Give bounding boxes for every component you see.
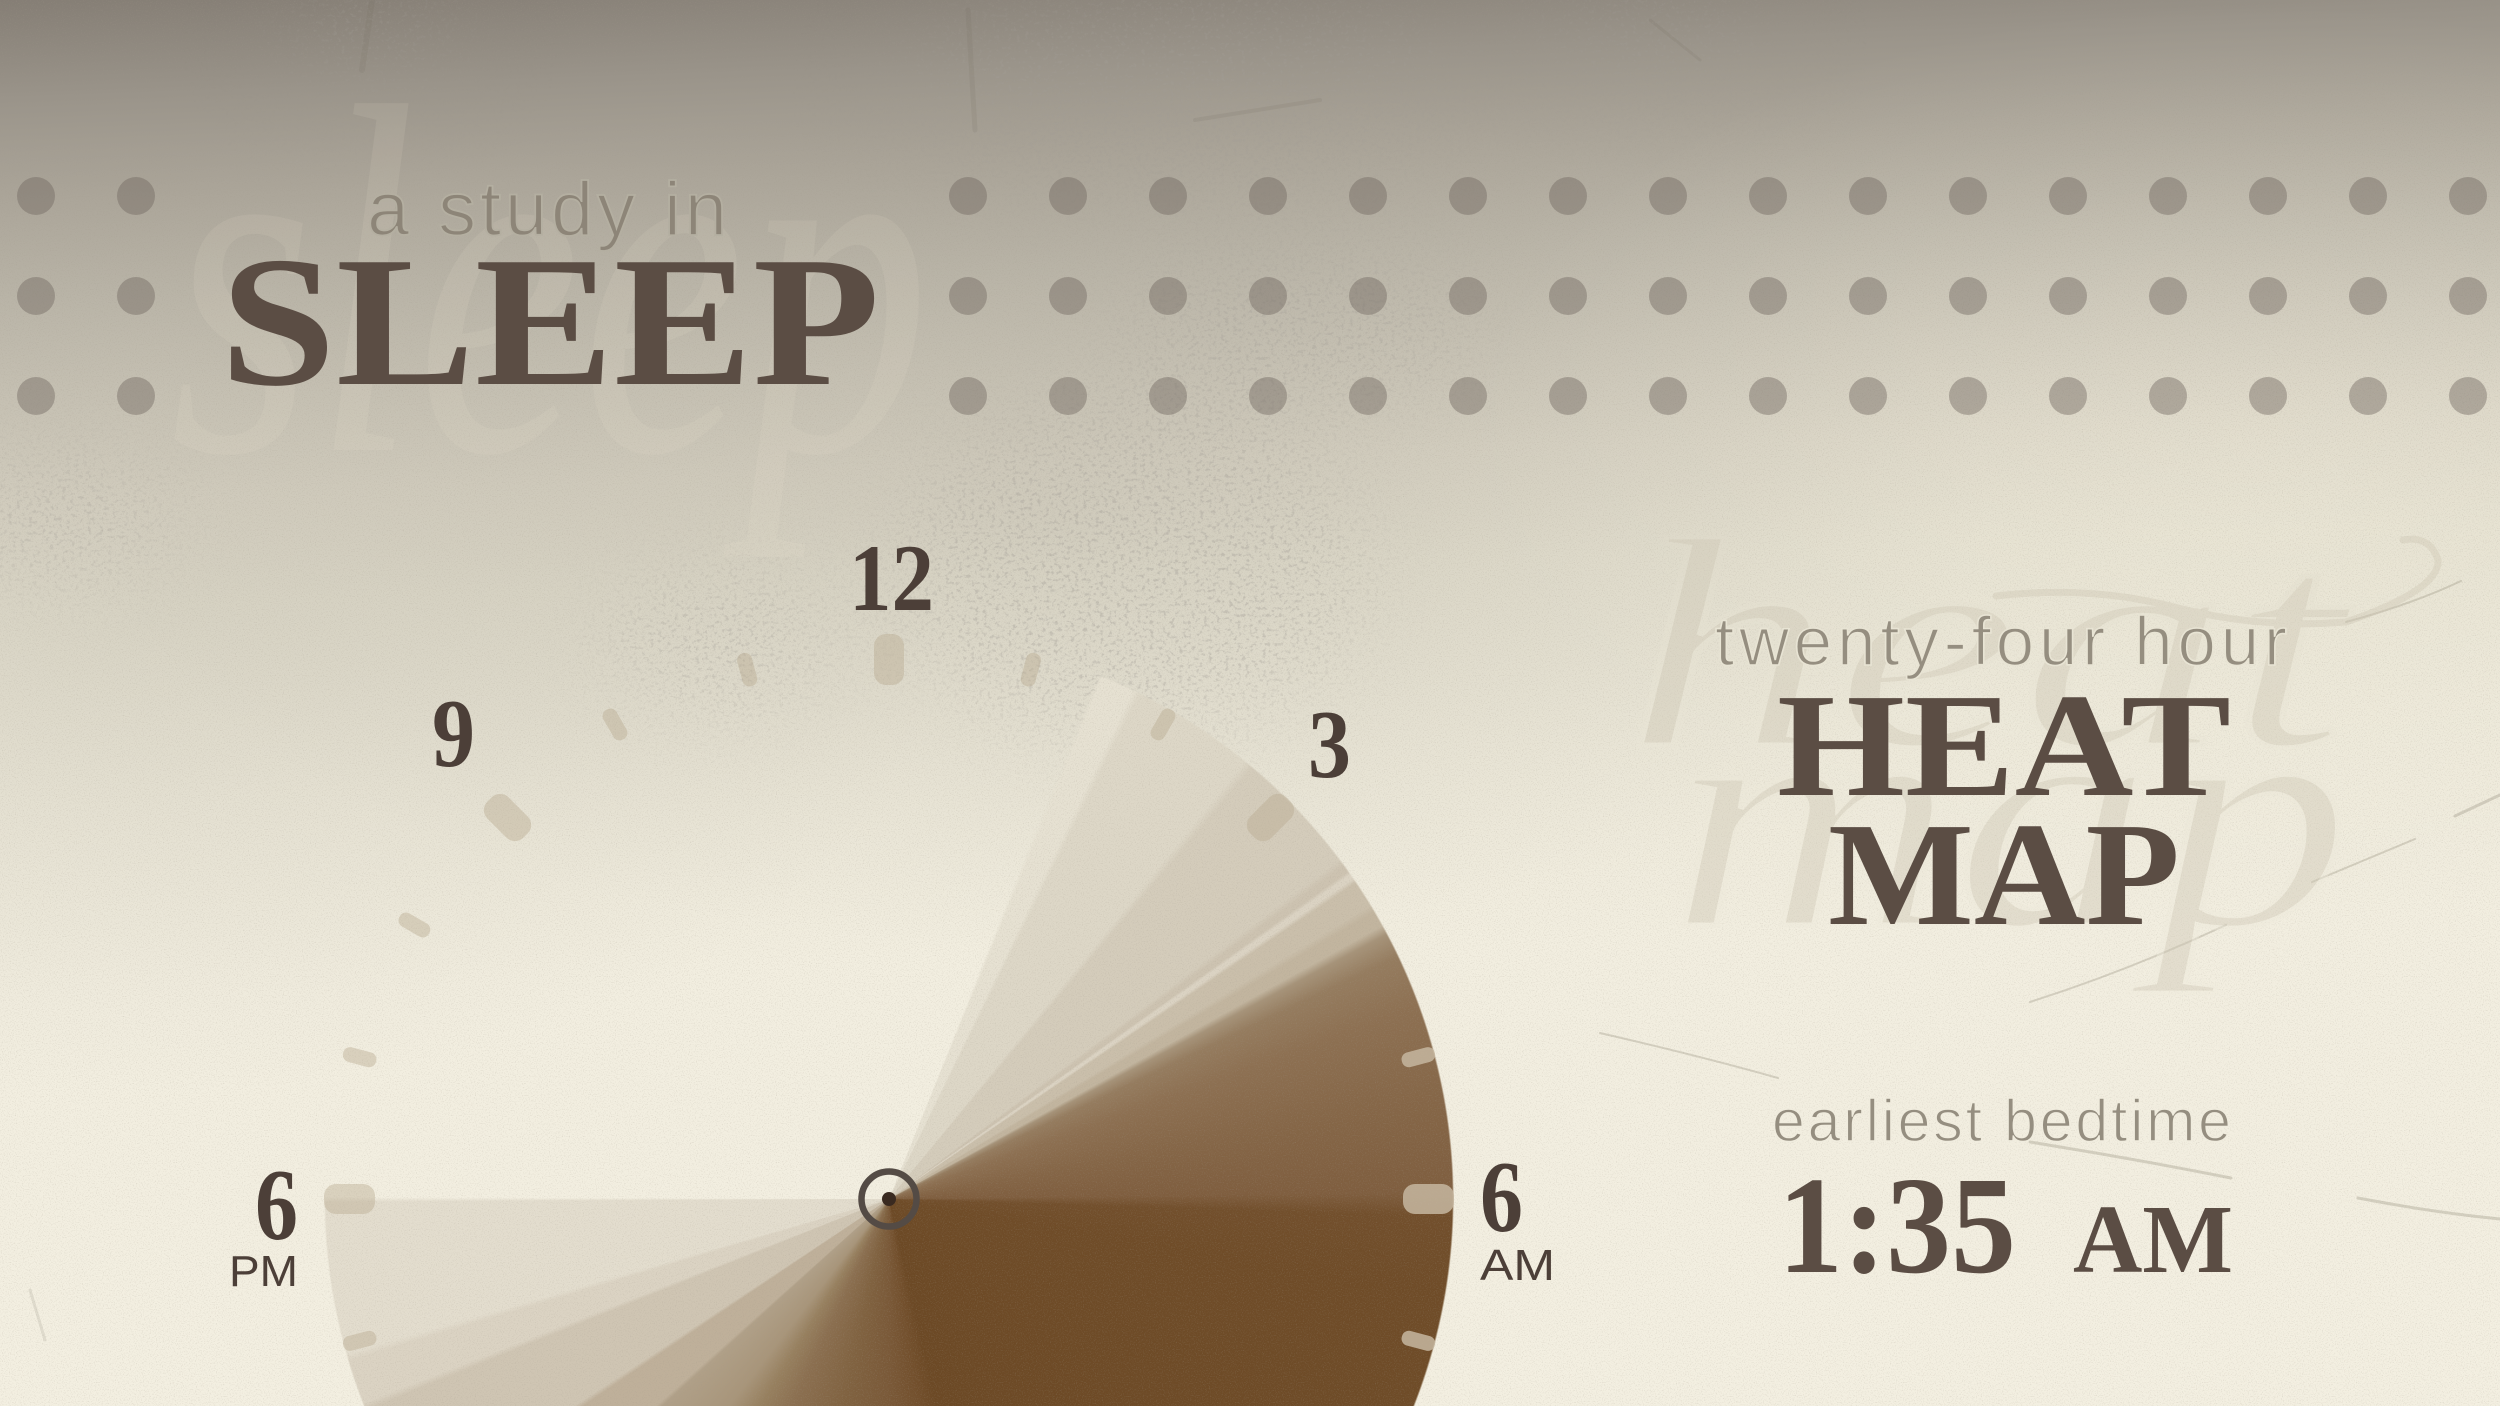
heading: twenty-four hour HEAT MAP: MAP	[1828, 793, 2180, 957]
dot grid	[17, 177, 2487, 415]
heading: twenty-four hour HEAT MAP: HEAT	[1777, 664, 2231, 828]
script word: heat: heat	[1625, 478, 2359, 810]
script word: map: map	[1670, 641, 2350, 995]
clock center icon	[862, 1172, 916, 1226]
hour label: 12: 12	[849, 525, 934, 631]
hour label: 6 AM: AM	[1480, 1241, 1555, 1290]
title: a study in SLEEP: SLEEP	[220, 219, 880, 425]
heading: twenty-four hour HEAT MAP	[1715, 603, 2287, 957]
script word: heat	[1625, 478, 2438, 810]
hour label: 6 AM	[1480, 1141, 1555, 1290]
hour label: 6 PM: PM	[229, 1247, 298, 1296]
title: a study in SLEEP: a study in	[367, 167, 727, 252]
hour label: 6 PM: 6	[255, 1149, 298, 1262]
hour label: 6 PM	[229, 1149, 298, 1296]
stat: earliest bedtime: earliest bedtime	[1772, 1088, 2231, 1154]
heading: twenty-four hour HEAT MAP: twenty-four hour	[1715, 603, 2287, 680]
hour label: 9: 9	[432, 680, 475, 788]
hour label: 6 AM: 6	[1480, 1141, 1523, 1254]
script word: sleep: sleep	[170, 5, 930, 559]
stat: earliest bedtime	[1772, 1088, 2233, 1303]
clock tick marks	[324, 634, 1454, 1352]
stat: earliest bedtime: AM	[2073, 1186, 2233, 1294]
stat: earliest bedtime: 1:35	[1778, 1149, 2016, 1303]
hour label: 3: 3	[1308, 691, 1351, 799]
heat map wedge	[324, 634, 1454, 1406]
